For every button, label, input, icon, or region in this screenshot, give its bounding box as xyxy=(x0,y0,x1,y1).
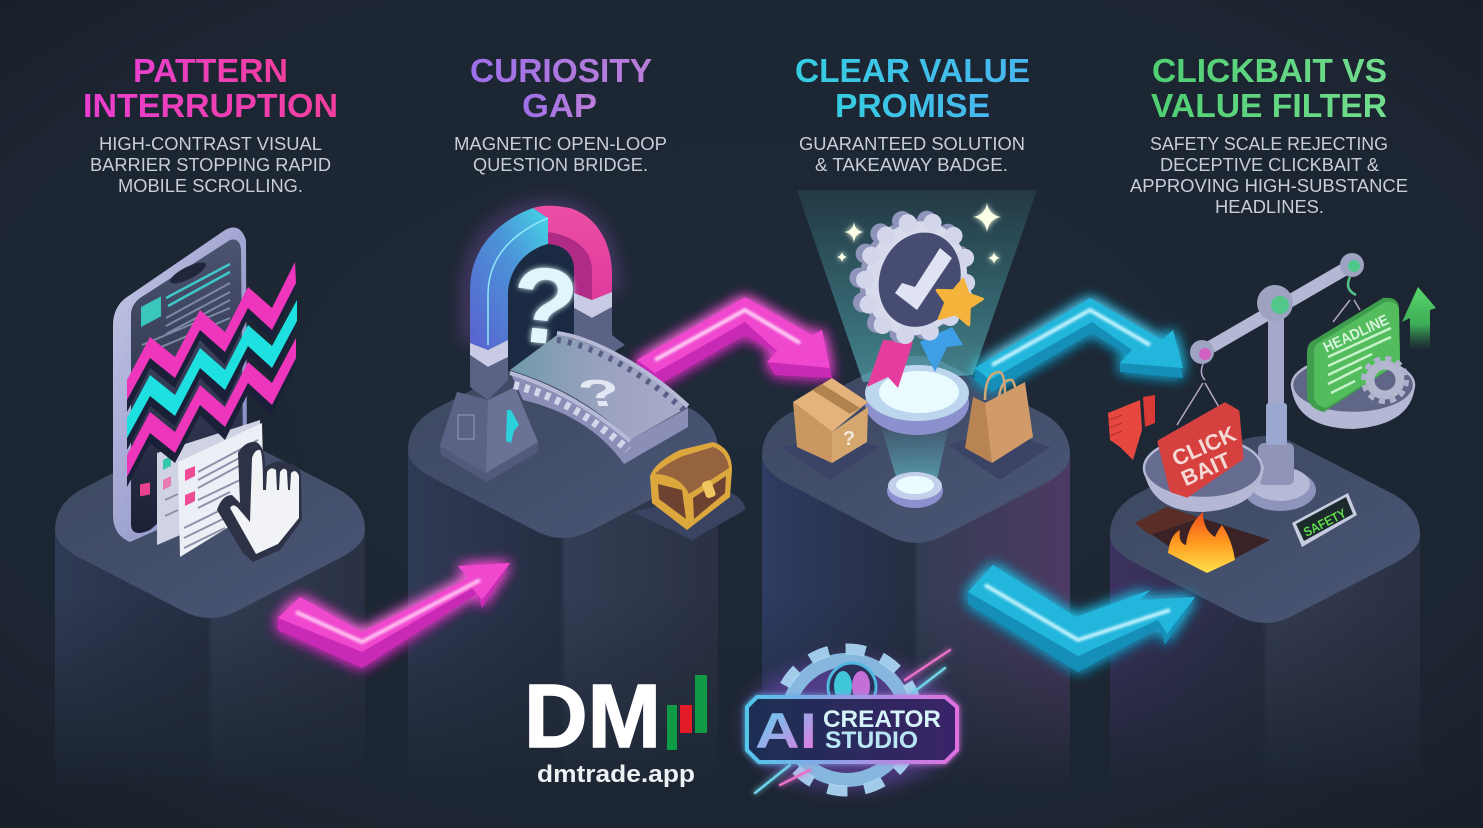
left pan xyxy=(1143,438,1264,512)
text: curiosity gap description: QUESTION BRIDGE. xyxy=(473,154,648,175)
arrow: cyan upper xyxy=(975,298,1183,392)
green headline card xyxy=(1307,298,1400,412)
heading: clear value promise xyxy=(795,52,1030,124)
ribbons xyxy=(867,327,963,388)
pointing hand cursor xyxy=(217,442,302,562)
heading: clickbait vs value filter: VALUE FILTER xyxy=(1151,87,1387,124)
magnet right inner shade xyxy=(548,232,592,300)
scale collar xyxy=(1266,403,1287,445)
red clickbait block: BAIT xyxy=(1177,447,1235,491)
heading: pattern interruption: INTERRUPTION xyxy=(83,87,338,124)
hanging strings xyxy=(1177,277,1360,473)
silver bands xyxy=(470,292,612,367)
magnet right arm xyxy=(533,206,612,300)
phone screen xyxy=(131,239,243,533)
green up arrow xyxy=(1402,287,1436,350)
paper pink bullets xyxy=(163,456,195,506)
logo: DM trade: dmtrade.app xyxy=(537,761,695,788)
green headline card: HEADLINE xyxy=(1321,311,1391,356)
upper light cone xyxy=(797,190,1037,382)
zigzag stripes xyxy=(127,262,297,477)
icon: phone with zigzag barrier and hand xyxy=(113,228,302,562)
logo: DM trade: DM xyxy=(524,667,661,767)
text: pattern interruption description: HIGH-CONTRAST VISUAL xyxy=(99,133,322,154)
bridge balusters xyxy=(514,385,628,450)
arrow: pink lower xyxy=(278,563,510,668)
text: clear value description: GUARANTEED SOLUTION xyxy=(799,133,1025,154)
logo: AI creator studio: CREATOR xyxy=(823,706,941,733)
heading: clickbait vs value filter: CLICKBAIT VS xyxy=(1152,52,1387,89)
gold star xyxy=(932,275,985,326)
text: pattern interruption description: MOBILE SCROLLING. xyxy=(118,175,303,196)
small disc xyxy=(887,472,943,508)
text: clickbait filter description: DECEPTIVE CLICKBAIT & xyxy=(1160,154,1380,175)
shopping box with pad xyxy=(782,378,880,480)
question mark on bridge: ? xyxy=(572,372,629,414)
light beam and badge xyxy=(782,190,1050,508)
text: clickbait filter description: APPROVING HIGH-SUBSTANCE xyxy=(1130,175,1408,196)
front paper xyxy=(178,423,264,557)
arrow: cyan lower xyxy=(968,565,1195,672)
zigzag dark shadows xyxy=(127,270,295,487)
phone screen content xyxy=(140,259,230,496)
text: curiosity gap description: MAGNETIC OPEN-LOOP xyxy=(454,133,667,154)
logo: AI creator studio: AI xyxy=(755,703,817,759)
plaque xyxy=(747,697,957,762)
heading: clear value promise: CLEAR VALUE xyxy=(795,52,1030,89)
magnet glow xyxy=(470,208,612,343)
beam end right xyxy=(1340,253,1364,277)
heading: pattern interruption xyxy=(83,52,338,124)
fire pit xyxy=(1135,507,1270,573)
pillar 2 xyxy=(408,370,718,744)
bridge rails xyxy=(510,333,688,441)
heading: curiosity gap: CURIOSITY xyxy=(470,52,652,89)
paper lines xyxy=(165,440,258,548)
gear xyxy=(776,649,918,791)
streaks xyxy=(755,650,950,793)
scalloped badge xyxy=(843,205,983,350)
heading: curiosity gap: GAP xyxy=(522,87,597,124)
treasure chest xyxy=(650,442,732,530)
shopping bag with pad xyxy=(948,372,1050,480)
logo: AI creator studio: STUDIO xyxy=(825,727,918,754)
heading: pattern interruption: PATTERN xyxy=(133,52,288,89)
text: pattern interruption description: BARRIER STOPPING RAPID xyxy=(90,154,331,175)
phone body xyxy=(113,228,247,542)
pad under chest xyxy=(633,490,745,540)
back paper xyxy=(157,420,262,545)
scale beam xyxy=(1202,265,1352,352)
heading: clear value promise: PROMISE xyxy=(835,87,990,124)
beam end left xyxy=(1190,340,1214,364)
pillar 1 xyxy=(55,450,365,749)
pivot xyxy=(1257,285,1293,321)
red clickbait block: CLICK xyxy=(1168,421,1240,471)
check mark xyxy=(895,248,952,310)
heading: clickbait vs value filter xyxy=(1151,52,1387,124)
magnet lower legs xyxy=(470,307,625,400)
safety sign: SAFETY xyxy=(1301,505,1349,540)
logo: DM trade xyxy=(524,667,707,788)
text: clickbait filter description: SAFETY SCALE REJECTING xyxy=(1150,133,1388,154)
gear xyxy=(1364,359,1406,401)
red clickbait block xyxy=(1160,405,1241,495)
shopping box with pad: ? xyxy=(843,428,855,450)
icon: safety scale xyxy=(1108,253,1436,573)
tower base xyxy=(440,387,538,482)
text: clickbait filter description xyxy=(1130,133,1408,217)
safety sign xyxy=(1292,493,1357,547)
brain xyxy=(828,663,876,711)
bridge side xyxy=(510,372,688,464)
magnet left arm xyxy=(470,208,548,350)
text: clear value description: & TAKEAWAY BADGE. xyxy=(815,154,1008,175)
sparkles xyxy=(837,203,1001,264)
text: pattern interruption description xyxy=(90,133,331,196)
question mark above bridge: ? xyxy=(505,242,584,369)
arrow: pink upper xyxy=(637,297,832,384)
scale pole xyxy=(1268,310,1284,445)
heading: curiosity gap xyxy=(470,52,652,124)
pillar 3 xyxy=(762,356,1070,760)
icon: magnet and question bridge xyxy=(440,206,745,540)
glow xyxy=(745,660,955,790)
text: curiosity gap description xyxy=(454,133,667,175)
text: clickbait filter description: HEADLINES. xyxy=(1215,196,1324,217)
red thumbs down xyxy=(1108,395,1155,460)
magnet inner gap xyxy=(508,244,574,370)
bridge deck top xyxy=(510,335,688,440)
lower light cone xyxy=(882,430,948,480)
logo: AI creator studio xyxy=(745,649,957,793)
pillar 4 xyxy=(1110,436,1420,758)
right pan xyxy=(1291,357,1415,429)
platform disc xyxy=(865,365,969,435)
magnet light edge xyxy=(488,218,548,345)
candlesticks xyxy=(667,675,707,750)
text: clear value description xyxy=(799,133,1025,175)
scale base xyxy=(1244,443,1316,511)
